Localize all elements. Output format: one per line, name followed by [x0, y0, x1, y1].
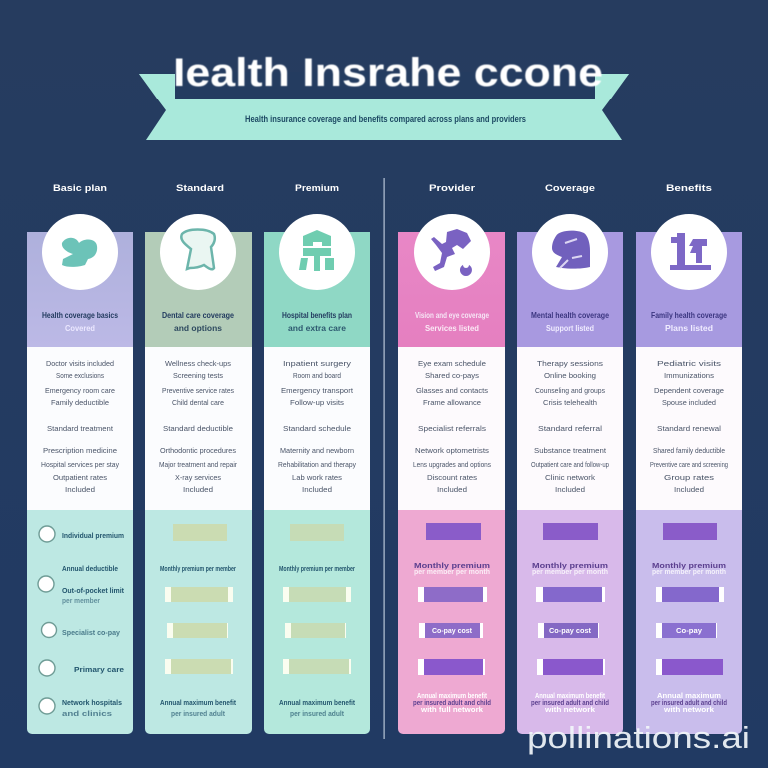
details: Major treatment and repair — [159, 460, 237, 469]
details: Online booking — [544, 371, 596, 380]
heading: Covered — [65, 323, 95, 333]
details: Immunizations — [664, 371, 714, 380]
panel: column 1 — [27, 214, 133, 734]
column labels: Standard — [176, 183, 224, 193]
cost bars: Annual maximum benefit — [279, 698, 355, 707]
details: Wellness check-ups — [165, 359, 231, 368]
details: Included — [302, 485, 332, 494]
heading: and extra care — [288, 323, 346, 333]
details: Substance treatment — [534, 446, 607, 455]
details: Network optometrists — [415, 446, 489, 455]
heading: Mental health coverage — [531, 310, 609, 320]
heading — [415, 310, 489, 333]
details: Shared family deductible — [653, 446, 725, 455]
cost bars: Co-pay cost — [549, 626, 591, 635]
details: Included — [674, 485, 704, 494]
heading: Support listed — [546, 323, 594, 333]
details: Included — [437, 485, 467, 494]
cost bars: Monthly premium — [532, 561, 608, 570]
subtitle: Health insurance coverage and benefits compared across plans and providers — [245, 114, 526, 124]
cost bars: per insured adult — [171, 709, 225, 718]
details: Standard deductible — [163, 424, 233, 433]
checklist: Annual deductible — [62, 564, 118, 573]
details: Hospital services per stay — [41, 460, 119, 469]
checklist: Specialist co-pay — [62, 628, 121, 637]
cost bars: Monthly premium per member — [279, 564, 355, 573]
details: Shared co-pays — [425, 371, 479, 380]
details: Prescription medicine — [43, 446, 117, 455]
heading — [282, 310, 352, 333]
details — [413, 359, 491, 494]
heading: Hospital benefits plan — [282, 310, 352, 320]
cost bars: per member per month — [414, 567, 490, 576]
heading — [162, 310, 234, 333]
details: Counseling and groups — [535, 386, 605, 395]
cost bars: Annual maximum benefit — [535, 691, 605, 700]
cost bars — [413, 523, 491, 714]
column labels: Basic plan — [53, 183, 107, 193]
details: Follow-up visits — [290, 398, 344, 407]
column labels: Benefits — [666, 183, 712, 193]
icon glyph — [670, 233, 711, 270]
details: Preventive care and screening — [650, 460, 728, 469]
icon badge — [160, 214, 236, 290]
details: Included — [555, 485, 585, 494]
checklist: Out-of-pocket limit — [62, 586, 124, 595]
icon glyph — [181, 230, 215, 269]
cost bars: per insured adult and child — [413, 698, 491, 707]
icon badge — [279, 214, 355, 290]
details: Standard referral — [538, 424, 602, 433]
heading — [531, 310, 609, 333]
details: Rehabilitation and therapy — [278, 460, 356, 469]
details: Orthodontic procedures — [160, 446, 236, 455]
cost bars: per insured adult — [290, 709, 344, 718]
cost bars: Monthly premium — [414, 561, 490, 570]
cost bars: per member per month — [652, 567, 726, 576]
heading — [42, 310, 118, 333]
details: Frame allowance — [423, 398, 481, 407]
details: Lens upgrades and options — [413, 460, 491, 469]
details: Lab work rates — [292, 473, 342, 482]
checklist: Individual premium — [62, 531, 124, 540]
details — [650, 359, 728, 494]
cost bars — [279, 524, 355, 718]
details: Screening tests — [173, 371, 223, 380]
details: Group rates — [664, 473, 714, 482]
details: Child dental care — [172, 398, 224, 407]
details: Emergency transport — [281, 386, 354, 395]
checklist: Primary care — [74, 665, 124, 674]
icon glyph — [431, 229, 472, 276]
icon badge — [42, 214, 118, 290]
column labels — [53, 183, 712, 193]
cost bars: with network — [663, 705, 715, 714]
details: Spouse included — [662, 398, 716, 407]
panel: column 6 — [636, 214, 742, 734]
details: Some exclusions — [56, 371, 104, 380]
icon badge — [414, 214, 490, 290]
cost bars: per member per month — [532, 567, 608, 576]
checklist: Network hospitals — [62, 698, 122, 707]
cost bars: Annual maximum — [657, 691, 721, 700]
watermark: pollinations.ai — [527, 720, 750, 755]
heading: Vision and eye coverage — [415, 310, 489, 320]
cost bars: Monthly premium per member — [160, 564, 236, 573]
details: Family deductible — [51, 398, 109, 407]
column labels: Premium — [295, 183, 339, 193]
icon badge — [532, 214, 608, 290]
details: Maternity and newborn — [280, 446, 354, 455]
details — [531, 359, 609, 494]
details: Discount rates — [427, 473, 477, 482]
checklist — [38, 526, 124, 718]
panel: column 5 — [517, 214, 623, 734]
details — [278, 359, 356, 494]
details: Doctor visits included — [46, 359, 114, 368]
checklist: and clinics — [62, 709, 112, 718]
cost bars: Annual maximum benefit — [417, 691, 487, 700]
cost bars: Monthly premium — [652, 561, 726, 570]
icon badge — [651, 214, 727, 290]
details: Clinic network — [545, 473, 595, 482]
panel: column 3 — [264, 214, 370, 734]
details: Standard schedule — [283, 424, 351, 433]
cost bars: with network — [544, 705, 596, 714]
checklist: per member — [62, 596, 100, 605]
cost bars: with full network — [420, 705, 484, 714]
details — [41, 359, 119, 494]
column labels: Coverage — [545, 183, 595, 193]
details: Outpatient rates — [53, 473, 107, 482]
cost bars: Co-pay cost — [432, 626, 472, 635]
details: Emergency room care — [45, 386, 115, 395]
details: Eye exam schedule — [418, 359, 486, 368]
icon glyph — [552, 231, 590, 269]
details: Standard treatment — [47, 424, 114, 433]
details: Preventive service rates — [162, 386, 234, 395]
details: Standard renewal — [657, 424, 721, 433]
panel: column 4 — [398, 214, 505, 734]
details: Outpatient care and follow-up — [531, 460, 609, 469]
details: Specialist referrals — [418, 424, 486, 433]
title: Iealth Insrahe ccone — [173, 51, 603, 95]
heading: Family health coverage — [651, 310, 727, 320]
cost bars: per insured adult and child — [531, 698, 609, 707]
details: Included — [65, 485, 95, 494]
icon glyph — [62, 238, 97, 267]
ribbon banner — [139, 72, 629, 140]
cost bars: per insured adult and child — [651, 698, 727, 707]
details — [159, 359, 237, 494]
heading: Health coverage basics — [42, 310, 118, 320]
cost bars — [160, 524, 236, 718]
details: Dependent coverage — [654, 386, 724, 395]
details: Glasses and contacts — [416, 386, 488, 395]
heading: and options — [174, 323, 222, 333]
heading: Plans listed — [665, 323, 713, 333]
panel: column 2 — [145, 214, 252, 734]
icon glyph — [299, 230, 334, 271]
cost bars: Annual maximum benefit — [160, 698, 236, 707]
details: Pediatric visits — [657, 359, 721, 368]
heading — [651, 310, 727, 333]
heading: Dental care coverage — [162, 310, 234, 320]
details: Included — [183, 485, 213, 494]
cost bars — [651, 523, 727, 714]
cost bars: Co-pay — [676, 626, 703, 635]
details: Crisis telehealth — [543, 398, 597, 407]
details: X-ray services — [175, 473, 221, 482]
details: Therapy sessions — [537, 359, 603, 368]
details: Inpatient surgery — [283, 359, 351, 368]
details: Room and board — [293, 371, 341, 380]
center divider — [384, 178, 385, 739]
column labels: Provider — [429, 183, 476, 193]
cost bars — [531, 523, 609, 714]
heading: Services listed — [425, 323, 479, 333]
